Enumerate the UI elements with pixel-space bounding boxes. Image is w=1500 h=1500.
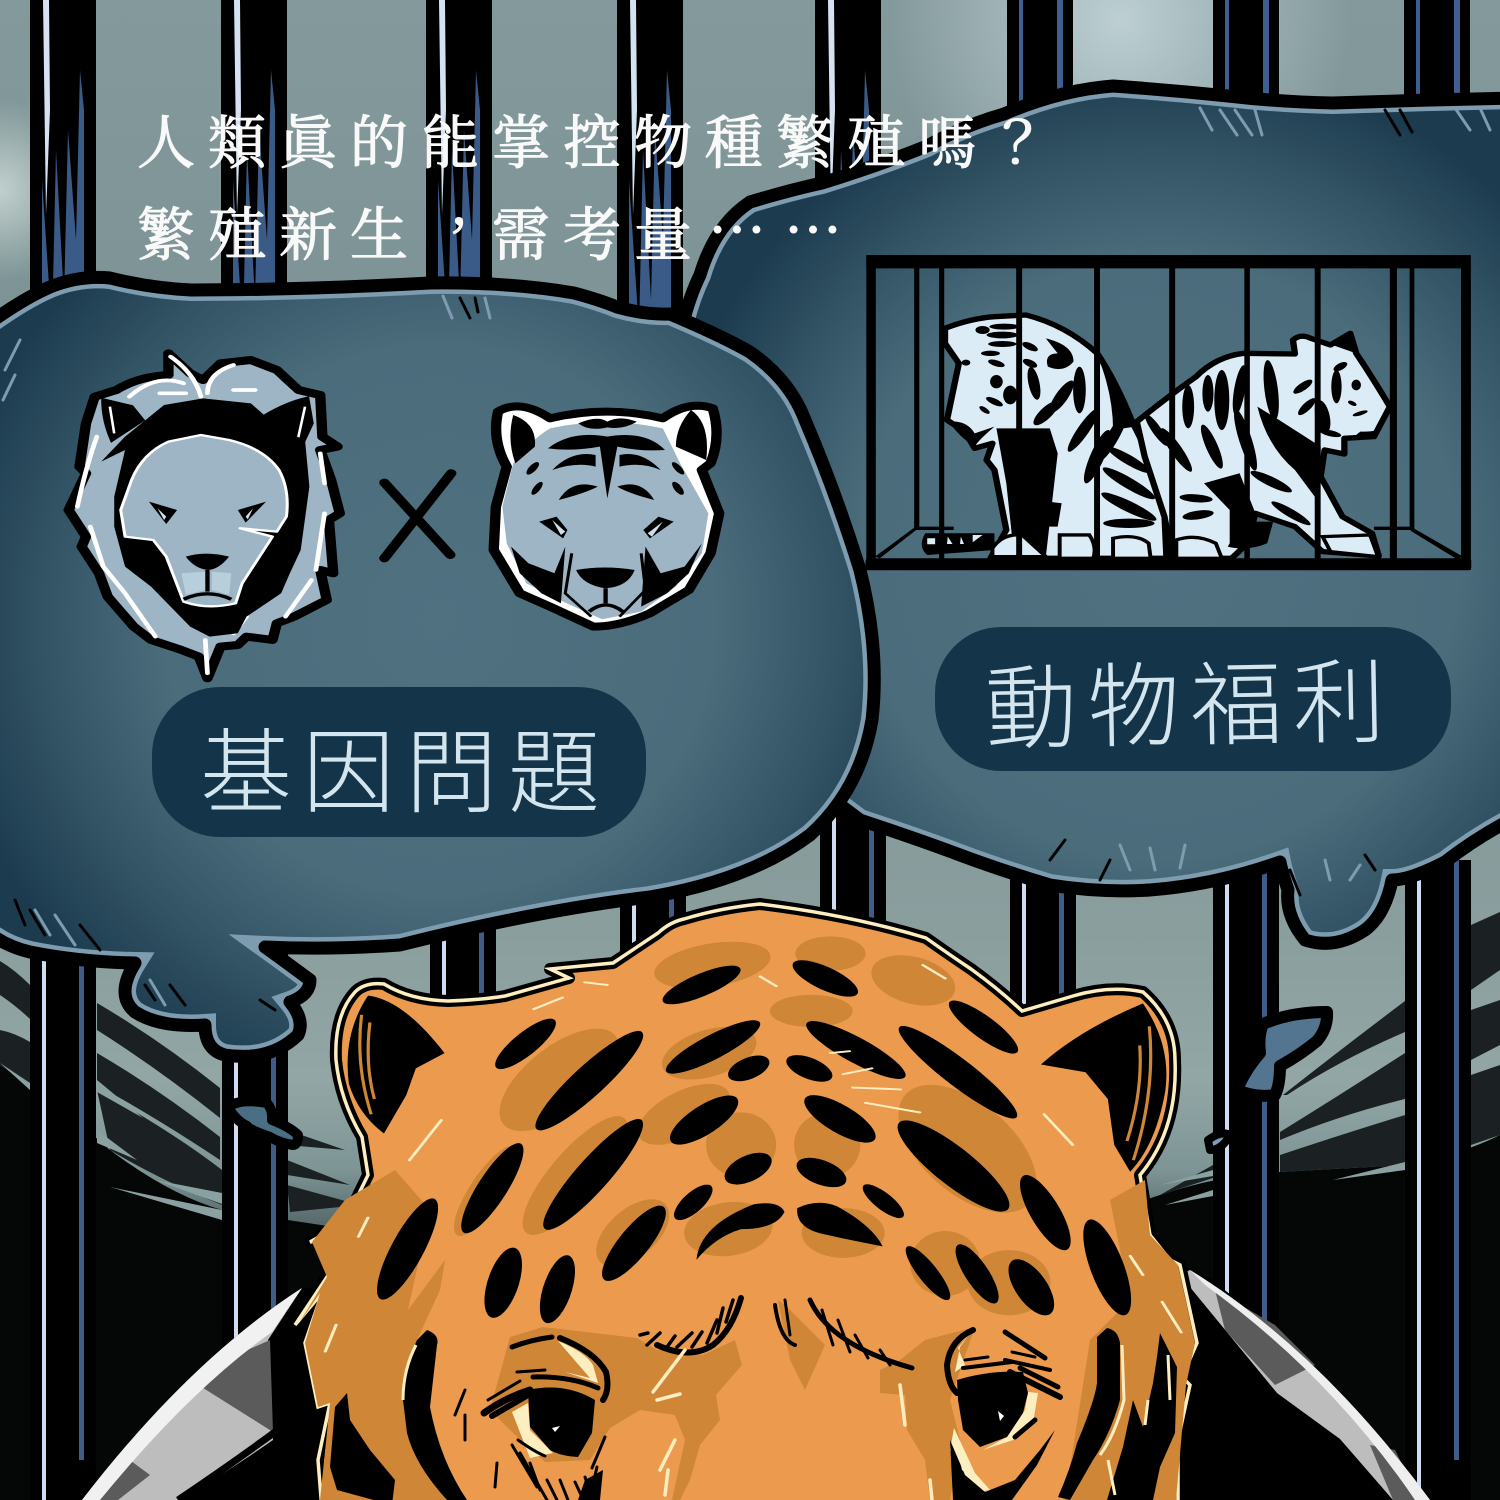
cage frame — [866, 255, 1471, 570]
floor waves — [0, 912, 1500, 1500]
welfare label pill: 動物福利 — [984, 653, 1386, 762]
paws — [992, 535, 1151, 558]
title — [137, 111, 1060, 268]
bubble fur ticks — [1050, 108, 1490, 895]
title: ， — [430, 197, 501, 262]
title: 繁殖新生 — [137, 203, 421, 268]
title: 需考量 — [492, 203, 705, 268]
small thought bubbles — [228, 1012, 1327, 1150]
ears — [103, 398, 312, 447]
title: …… — [708, 180, 860, 245]
cross symbol — [384, 473, 451, 558]
genetics label pill — [152, 687, 646, 837]
mane highlights — [77, 357, 325, 673]
left band — [82, 1288, 302, 1500]
face shading — [490, 1300, 975, 1500]
dark mane hood — [101, 398, 309, 637]
left tiger — [922, 315, 1166, 558]
welfare label pill — [935, 627, 1451, 771]
tiger stripes — [511, 418, 702, 612]
genetics label pill: 基因問題 — [200, 723, 600, 825]
tiger head — [295, 904, 1197, 1500]
bubble fur ticks — [3, 296, 490, 1010]
forehead stripes — [365, 954, 1141, 1325]
right tiger — [1137, 333, 1390, 558]
icon: tiger head — [494, 406, 719, 627]
title: 人類眞的能掌控物種繁殖嗎？ — [137, 111, 1060, 176]
ears — [510, 410, 707, 463]
lion face — [121, 435, 287, 606]
cream fur highlights — [325, 965, 1181, 1352]
icon: two white tigers in a cage — [866, 255, 1471, 570]
lower black stripes and gaps in fur — [330, 1328, 1177, 1500]
tiger right eye — [947, 1330, 1060, 1500]
brow lashes — [640, 1298, 912, 1368]
thought bubble: genetic problems — [0, 277, 874, 1056]
ears — [348, 996, 1166, 1172]
thought bubble: animal welfare — [670, 86, 1500, 943]
fur shading and stripes — [325, 933, 1181, 1352]
face fur highlights — [653, 1350, 932, 1500]
cream edges on lower fur — [403, 1345, 1170, 1495]
tiger tail — [922, 533, 994, 555]
tiger's body and striped arms — [82, 1270, 1430, 1500]
head silhouette — [295, 904, 1197, 1500]
icon: lion head — [69, 353, 340, 678]
tiger left eye — [455, 1337, 607, 1500]
side fur shade — [298, 1170, 1195, 1500]
right band — [1180, 1270, 1430, 1500]
